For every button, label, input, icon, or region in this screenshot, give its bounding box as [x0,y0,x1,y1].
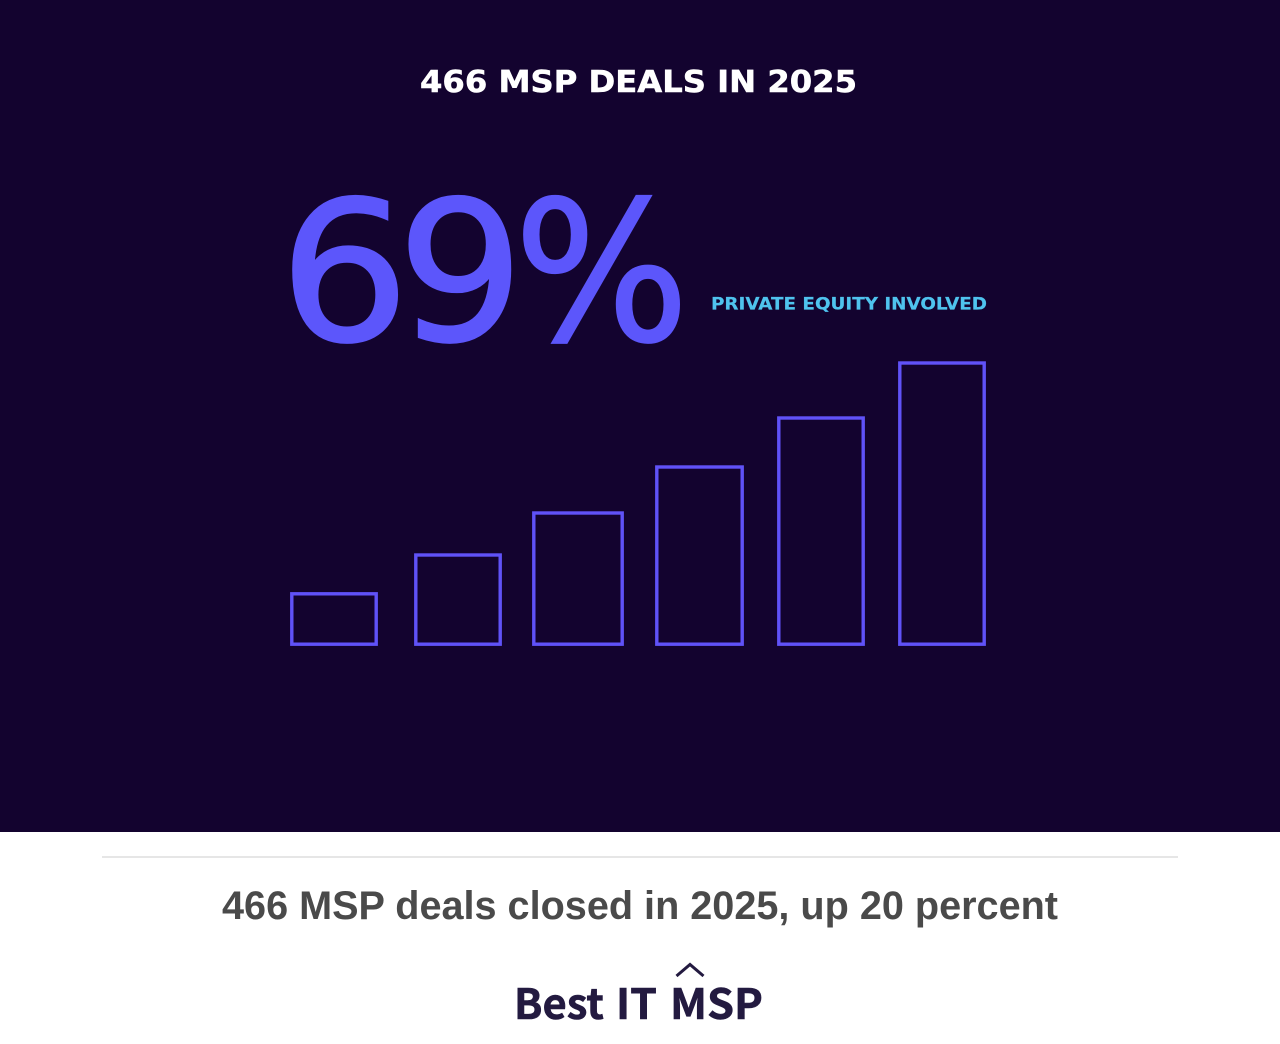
bar chart [292,363,984,644]
bar 3 [534,513,622,644]
big statistic: 69% [279,160,689,387]
bar 2 [416,555,500,644]
bar 6 [900,363,984,644]
panel: dark infographic background [0,0,1280,832]
big statistic: 69%: % [514,160,689,386]
bar 4 [657,467,742,644]
big statistic: 69%: 6 [279,160,410,387]
bar 5 [779,418,863,644]
logo wordmark: Best [514,971,604,1032]
big statistic: 69%: 9 [397,161,524,386]
logo icon: chevron roof [676,964,704,976]
bar 1 [292,594,376,644]
caption divider [102,856,1178,858]
logo wordmark: MSP [670,971,763,1032]
title: 466 MSP DEALS IN 2025 [420,65,857,100]
logo: Best IT MSP [514,964,763,1032]
logo wordmark: IT [616,971,657,1032]
logo wordmark [514,971,763,1032]
caption: 466 MSP deals closed in 2025, up 20 percent [222,884,1058,928]
statistic label: PRIVATE EQUITY INVOLVED [711,294,987,314]
